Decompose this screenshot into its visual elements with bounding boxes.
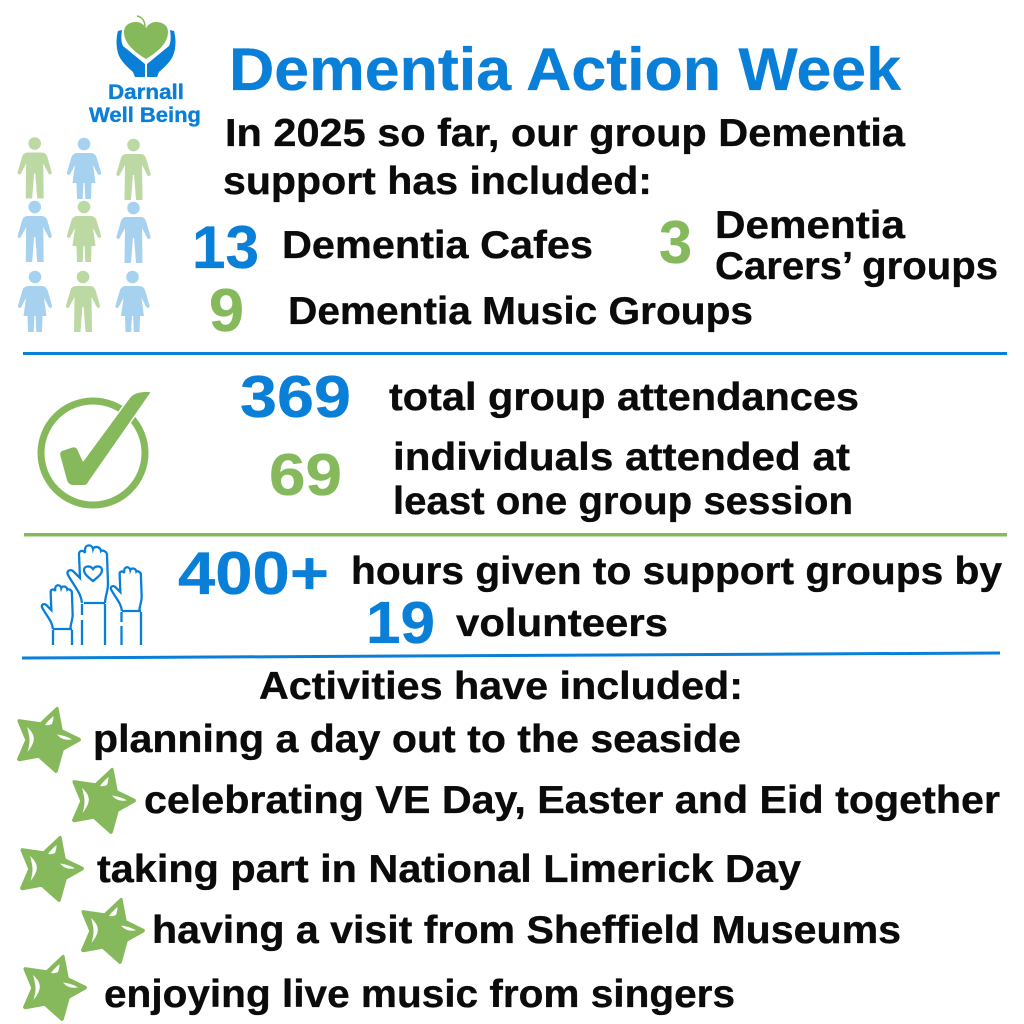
stat: 9 Dementia Music Groups [209, 277, 753, 344]
stat: 19 volunteers: 19 [366, 590, 435, 656]
logo: Darnall Well Being: Well Being [89, 104, 201, 127]
activity: museums: having a visit from Sheffield Museums [152, 909, 901, 952]
activity: live music [24, 956, 735, 1020]
activity: celebrations [73, 769, 1000, 833]
heading: activities: Activities have included: [259, 665, 743, 708]
stat: 69 individuals: individuals attended at [393, 436, 850, 479]
logo: Darnall Well Being [89, 16, 201, 127]
stat: 3 Dementia Carers' groups: 3 [659, 209, 692, 276]
stat: 3 Dementia Carers' groups: Dementia [715, 204, 906, 247]
stat: 400+ hours [178, 540, 1003, 607]
intro text: support has included: [223, 160, 652, 203]
title: Dementia Action Week [229, 36, 902, 103]
stat: 3 Dementia Carers' groups [659, 204, 998, 288]
stat: 369 total group attendances: total group attendances [389, 376, 859, 419]
stat: 400+ hours: 400+ [178, 540, 329, 607]
stat: 19 volunteers: volunteers [456, 602, 668, 645]
stat: 13 Dementia Cafes: Dementia Cafes [282, 224, 593, 267]
logo stem [137, 16, 145, 27]
activity: seaside [18, 708, 741, 772]
intro text [223, 112, 906, 203]
logo heart [124, 22, 168, 59]
stat: 19 volunteers [366, 590, 668, 656]
stat: 9 Dementia Music Groups: Dementia Music Groups [288, 290, 753, 333]
intro text: In 2025 so far, our group Dementia [225, 112, 906, 155]
icon: nine people [18, 137, 151, 332]
activity: museums [82, 899, 901, 963]
stat: 400+ hours: hours given to support groups by [351, 550, 1003, 593]
icon: check mark in circle [41, 392, 150, 505]
activity: live music: enjoying live music from singers [104, 973, 735, 1016]
activity: seaside: planning a day out to the seaside [93, 718, 741, 761]
logo wordmark: Darnall [108, 81, 184, 104]
logo hands [116, 30, 176, 77]
stat: 369 total group attendances: 369 [240, 364, 351, 430]
stat: 13 Dementia Cafes: 13 [192, 214, 259, 281]
stat: 69 individuals [269, 436, 853, 523]
stat: 369 total group attendances [240, 364, 859, 430]
stat: 69 individuals: least one group session [393, 480, 853, 523]
stat: 69 individuals: 69 [269, 442, 342, 508]
activity: limerick: taking part in National Limerick Day [97, 848, 802, 891]
activity: limerick [21, 837, 802, 901]
stat: 13 Dementia Cafes [192, 214, 593, 281]
activity: celebrations: celebrating VE Day, Easter and Eid together [144, 779, 1000, 822]
stat: 9 Dementia Music Groups: 9 [209, 277, 244, 344]
icon: raised hands with heart [42, 545, 142, 645]
stat: 3 Dementia Carers' groups: Carers’ groups [715, 245, 998, 288]
